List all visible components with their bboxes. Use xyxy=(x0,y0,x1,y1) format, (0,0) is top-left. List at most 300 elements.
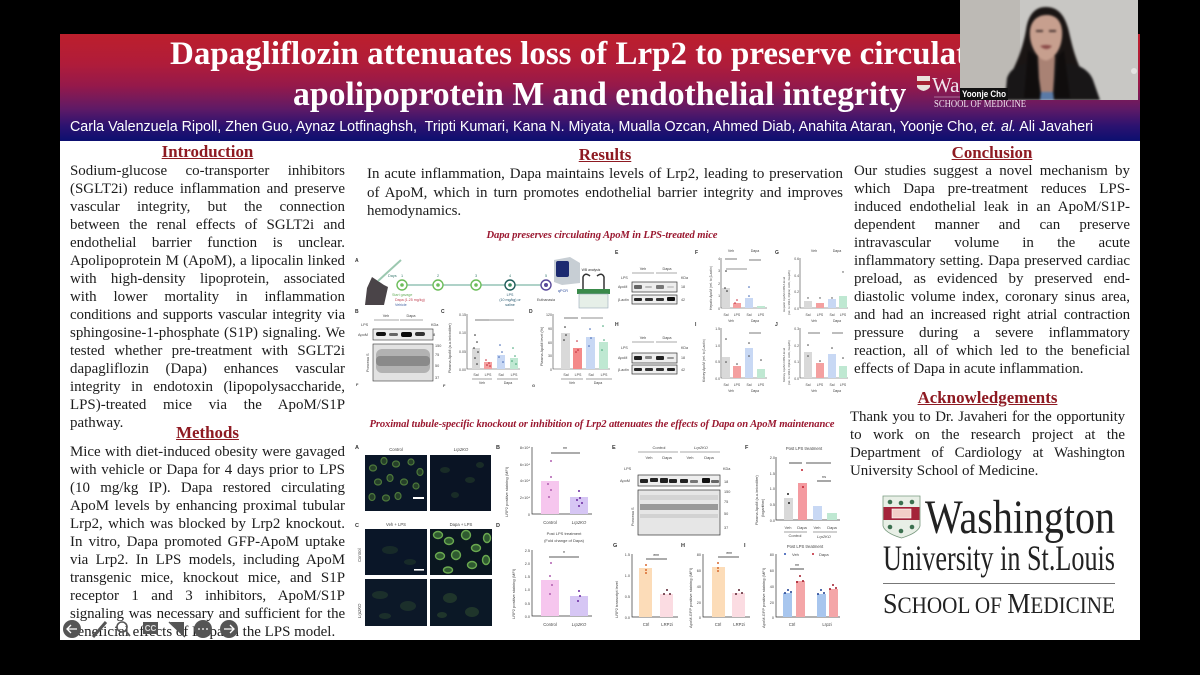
panel F: post LPS plasma ApoM chart: Veh xyxy=(814,525,820,530)
text block: methods: (10 mg/kg IP). Dapa restored circulating xyxy=(70,480,345,496)
panel I: ApoM-GFP veh vs dapa chart: Ctrl xyxy=(789,622,795,627)
panel D: post LPS fold change bar chart: 2.5 xyxy=(525,549,530,553)
panel B: western blot: 50 xyxy=(435,364,439,368)
text block: methods: receptor 1 and 3 inhibitors, ApoM/S1P xyxy=(70,588,345,604)
text block: introduction xyxy=(70,163,345,431)
text block: introduction: LPS)-treated mice via the ApoM/S1P xyxy=(70,397,345,413)
university logo xyxy=(883,491,1115,620)
panel B: LRP2 staining bar chart: ** xyxy=(563,447,567,453)
panel D: plasma ApoM level bar chart: 120 xyxy=(546,313,552,317)
university logo: SCHOOL OF MEDICINE xyxy=(883,588,1115,620)
panel G: hepatic mRNA chart: LPS xyxy=(817,313,824,317)
panel G: hepatic mRNA chart xyxy=(775,249,848,323)
panel I: kidney ApoM chart: I xyxy=(695,322,697,328)
blazer xyxy=(1005,64,1100,100)
panel D: post LPS fold change bar chart: 2.0 xyxy=(525,562,530,566)
panel C: microscopy four conditions: C xyxy=(355,523,359,529)
text block: acknowledgements: Thank you to Dr. Javaheri for the opportunity xyxy=(850,409,1125,425)
panel J: kidney mRNA chart: Sal xyxy=(830,383,835,387)
panel D: post LPS fold change bar chart: Post LPS treatment xyxy=(547,531,582,536)
panel D: plasma ApoM level bar chart: 30 xyxy=(548,354,552,358)
panel H: ApoM-GFP uptake chart: ApoM-GFP positive staining (MFI) xyxy=(688,567,693,628)
text block: introduction: sphingosine-1-phosphate (S1P) signaling. We xyxy=(70,325,345,341)
panel C: plasma ApoM bar chart: Dapa xyxy=(504,381,512,385)
panel E: western blot liver: 42 xyxy=(681,298,685,302)
panel B: western blot: Veh xyxy=(383,314,389,318)
text block: results: In acute inflammation, Dapa maintains levels of Lrp2, leading to preservation xyxy=(367,166,843,182)
panel G: LRP2 transcript chart: 1.0 xyxy=(625,574,630,578)
panel D: plasma ApoM level bar chart: Veh xyxy=(569,381,575,385)
panel I: kidney ApoM chart: 1.0 xyxy=(715,344,720,348)
panel D: plasma ApoM level bar chart: Sal xyxy=(563,373,569,377)
panel C: plasma ApoM bar chart: F xyxy=(443,383,446,388)
panel F: post LPS plasma ApoM chart: Control xyxy=(789,533,802,538)
panel H: western blot kidney: H xyxy=(615,322,619,328)
panel B: western blot: 37 xyxy=(435,376,439,380)
panel D: plasma ApoM level bar chart: Sal xyxy=(588,373,594,377)
text block: introduction: between the renal effects of SGLT2i and xyxy=(70,217,345,233)
text block: conclusion: diastolic volume index, coronary sinus area, xyxy=(854,289,1130,305)
text block: conclusion: pressure during a severe inflammatory xyxy=(854,325,1130,341)
panel A: experiment timeline: saline xyxy=(505,303,515,307)
panel F: post LPS plasma ApoM chart: 1.5 xyxy=(770,472,775,476)
text block: introduction: tested whether pre-treatment with SGLT2i xyxy=(70,343,345,359)
panel B: western blot: Dapa xyxy=(406,314,416,318)
text block: introduction: Sodium-glucose co-transporter inhibitors xyxy=(70,163,345,179)
panel D: post LPS fold change bar chart xyxy=(496,523,592,627)
panel G: hepatic mRNA chart: Sal xyxy=(806,313,811,317)
eyes xyxy=(1036,30,1043,32)
panel E: western blot and ponceau: E xyxy=(612,445,616,451)
panel I: kidney ApoM chart: 0.0 xyxy=(715,377,720,381)
text block: introduction: with lower mortality in inflammation xyxy=(70,289,345,305)
face xyxy=(1030,15,1062,60)
panel G: hepatic mRNA chart: 0.2 xyxy=(794,290,799,294)
panel A: microscopy control vs knockout: Control xyxy=(389,447,403,452)
panel A: experiment timeline: Start gavage xyxy=(392,293,412,297)
panel D: plasma ApoM level bar chart: Dapa xyxy=(594,381,602,385)
panel E: western blot liver: β-actin xyxy=(618,298,629,302)
panel H: western blot kidney xyxy=(615,322,688,374)
panel J: kidney mRNA chart: 0.0 xyxy=(794,377,799,381)
panel F: post LPS plasma ApoM chart: 0.5 xyxy=(770,503,775,507)
panel H: western blot kidney: LPS xyxy=(621,346,628,350)
panel E: western blot and ponceau: Veh xyxy=(687,455,693,460)
panel A: experiment timeline: Days xyxy=(388,274,397,278)
text block: methods: Lrp2, which was blocked by Lrp2 knockout. xyxy=(70,516,345,532)
panel D: plasma ApoM level bar chart: 0 xyxy=(550,368,552,372)
panel A: experiment timeline: 1 xyxy=(401,274,403,278)
panel G: LRP2 transcript chart: G xyxy=(613,543,617,549)
panel I: kidney ApoM chart: 0.5 xyxy=(715,360,720,364)
panel H: western blot kidney: ApoM xyxy=(618,356,627,360)
panel G: LRP2 transcript chart: LRP2 transcript level xyxy=(614,581,619,618)
panel J: kidney mRNA chart: LPS xyxy=(817,383,824,387)
panel F: post LPS plasma ApoM chart: Post LPS treatment xyxy=(786,446,823,451)
panel F: post LPS plasma ApoM chart: Plasma ApoM (a.u./microliter) xyxy=(755,474,759,525)
heading: acknowledgements: Acknowledgements xyxy=(918,388,1057,407)
panel F: hepatic ApoM chart xyxy=(695,249,767,323)
panel F: post LPS plasma ApoM chart: (logarithm) xyxy=(761,498,765,517)
text block: introduction: vascular integrity, but the connection xyxy=(70,199,345,215)
panel I: ApoM-GFP veh vs dapa chart xyxy=(744,543,840,628)
panel C: plasma ApoM bar chart: Sal xyxy=(473,373,479,377)
panel J: kidney mRNA chart: Kidney ApoM mRNA level xyxy=(782,347,786,382)
panel H: ApoM-GFP uptake chart xyxy=(681,543,750,628)
text block: methods: with vehicle or Dapa for 4 days prior to LPS xyxy=(70,462,345,478)
panel H: western blot kidney: 42 xyxy=(681,368,685,372)
text block: conclusion: effects of Dapa in acute inflammation. xyxy=(854,361,1084,377)
panel I: kidney ApoM chart: Sal xyxy=(724,383,729,387)
panel I: kidney ApoM chart: Sal xyxy=(747,383,752,387)
panel I: ApoM-GFP veh vs dapa chart: 0 xyxy=(772,616,774,620)
panel F: hepatic ApoM chart: Dapa xyxy=(751,249,759,253)
panel B: western blot: LPS xyxy=(361,323,369,327)
panel I: kidney ApoM chart: Veh xyxy=(728,389,734,393)
text block: conclusion: dependent manner and can preserve xyxy=(854,217,1130,233)
panel C: plasma ApoM bar chart: 0.10 xyxy=(459,331,466,335)
panel B: LRP2 staining bar chart: 8×10⁴ xyxy=(520,446,530,450)
panel G: LRP2 transcript chart: 1.5 xyxy=(625,553,630,557)
heading: introduction: Introduction xyxy=(162,142,253,161)
panel B: LRP2 staining bar chart xyxy=(496,445,592,525)
panel D: plasma ApoM level bar chart: LPS xyxy=(575,373,582,377)
panel D: plasma ApoM level bar chart: LPS xyxy=(601,373,608,377)
panel E: western blot and ponceau: KDa xyxy=(723,467,731,471)
panel C: plasma ApoM bar chart: C xyxy=(441,309,445,315)
heading: results: Results xyxy=(579,145,631,164)
panel I: kidney ApoM chart: Kidney ApoM (rel. to β-actin) xyxy=(702,339,706,382)
text block: introduction: dapagliflozin (Dapa) enhances vascular xyxy=(70,361,345,377)
panel J: kidney mRNA chart: 0.1 xyxy=(794,360,799,364)
panel B: western blot: F xyxy=(356,382,359,387)
panel G: hepatic mRNA chart: Dapa xyxy=(833,319,841,323)
panel E: western blot and ponceau: 18 xyxy=(724,480,728,484)
panel I: ApoM-GFP veh vs dapa chart: Dapa xyxy=(819,552,829,557)
panel B: LRP2 staining bar chart: 6×10⁴ xyxy=(520,463,530,467)
header logo xyxy=(917,73,1032,110)
panel A: experiment timeline xyxy=(355,257,610,308)
panel C: plasma ApoM bar chart: Sal xyxy=(498,373,504,377)
panel H: ApoM-GFP uptake chart: LRP2i xyxy=(733,622,745,627)
panel F: hepatic ApoM chart: 3 xyxy=(718,269,720,273)
text block: acknowledgements: Department of Cardiology at Washington xyxy=(850,445,1125,461)
panel B: western blot: 18 xyxy=(431,333,435,337)
panel G: hepatic mRNA chart: 0.6 xyxy=(794,257,799,261)
header logo: Washington xyxy=(932,73,1032,97)
panel G: hepatic mRNA chart: Veh xyxy=(811,249,817,253)
text block: methods: signaling was necessary and sufficient for the xyxy=(70,606,345,622)
text block: conclusion: intravascular volume in the acute xyxy=(854,235,1130,251)
panel J: kidney mRNA chart: Dapa xyxy=(833,389,841,393)
panel G: hepatic mRNA chart: Veh xyxy=(811,319,817,323)
panel E: western blot and ponceau xyxy=(612,445,731,535)
name tag: Yoonje Cho xyxy=(962,89,1006,99)
text block: conclusion: inflammatory setting. Dapa preserved cardiac xyxy=(854,253,1130,269)
panel C: plasma ApoM bar chart: LPS xyxy=(511,373,518,377)
panel E: western blot liver: Dapa xyxy=(662,267,672,271)
inner hair strands xyxy=(1024,50,1070,98)
panel B: western blot: 75 xyxy=(435,353,439,357)
text block: results: hemodynamics. xyxy=(367,203,461,219)
panel F: hepatic ApoM chart: LPS xyxy=(734,313,741,317)
panel D: post LPS fold change bar chart: Control xyxy=(543,622,557,627)
panel I: ApoM-GFP veh vs dapa chart: ApoM-GFP positive staining (MFI) xyxy=(761,567,766,628)
panel F: hepatic ApoM chart: LPS xyxy=(758,313,765,317)
panel A: experiment timeline: 5 xyxy=(545,274,547,278)
panel J: kidney mRNA chart: Sal xyxy=(806,383,811,387)
panel D: plasma ApoM level bar chart: Plasma ApoM level (%) xyxy=(540,326,544,366)
panel E: western blot and ponceau: ApoM xyxy=(620,479,630,483)
panel H: ApoM-GFP uptake chart: *** xyxy=(726,552,732,558)
panel B: LRP2 staining bar chart: 0 xyxy=(528,513,530,517)
heading: methods: Methods xyxy=(176,423,239,442)
panel C: plasma ApoM bar chart: 0.05 xyxy=(459,350,466,354)
panel I: kidney ApoM chart: 1.5 xyxy=(715,327,720,331)
panel F: hepatic ApoM chart: 0 xyxy=(718,307,720,311)
panel B: western blot: 150 xyxy=(435,344,441,348)
panel J: kidney mRNA chart: J xyxy=(775,322,778,328)
authors: Carla Valenzuela Ripoll, Zhen Guo, Aynaz Lotfinaghsh, Tripti Kumari, Kana N. Miyata, Mualla Ozcan, Ahmed Diab, Anahita Ataran, Yoonje Cho, et. al. Ali Javaheri xyxy=(70,119,1093,135)
panel A: microscopy control vs knockout: Lrp2KO xyxy=(454,447,469,452)
panel G: LRP2 transcript chart: 0.5 xyxy=(625,595,630,599)
panel B: western blot: Ponceau S xyxy=(366,353,370,372)
text block: results xyxy=(367,166,843,219)
panel E: western blot and ponceau: LPS xyxy=(624,467,632,471)
panel F: post LPS plasma ApoM chart: 0.0 xyxy=(770,519,775,523)
panel H: western blot kidney: Veh xyxy=(640,336,646,340)
panel E: western blot liver xyxy=(615,250,688,304)
panel A: experiment timeline: Dapa (1.25 mg/kg) xyxy=(395,298,425,302)
panel C: plasma ApoM bar chart: 0.15 xyxy=(459,313,466,317)
title: Dapagliflozin attenuates loss of Lrp2 to preserve circulating xyxy=(170,36,1011,72)
panel E: western blot liver: LPS xyxy=(621,276,628,280)
panel I: ApoM-GFP veh vs dapa chart: 40 xyxy=(770,585,774,589)
panel F: post LPS plasma ApoM chart xyxy=(745,445,840,539)
panel H: ApoM-GFP uptake chart: 60 xyxy=(697,569,701,573)
text block: introduction: endothelial barrier function is unclear. xyxy=(70,235,345,251)
panel F: post LPS plasma ApoM chart: F xyxy=(745,445,749,451)
text block: conclusion: which Dapa pre-treatment reduces LPS- xyxy=(854,181,1130,197)
text block: conclusion xyxy=(854,163,1130,377)
panel D: post LPS fold change bar chart: 0.0 xyxy=(525,615,530,619)
text block: acknowledgements xyxy=(850,409,1126,479)
panel A: experiment timeline: LPS xyxy=(507,293,514,297)
text block: introduction: (SGLT2i) reduce inflammation and preserve xyxy=(70,181,345,197)
panel A: experiment timeline: Vehicle xyxy=(395,303,407,307)
panel G: hepatic mRNA chart: Sal xyxy=(830,313,835,317)
panel E: western blot liver: KDa xyxy=(681,276,688,280)
panel J: kidney mRNA chart: (rel. to 36b4, Rpl32, Actb, Gapdh) xyxy=(787,340,791,385)
panel F: hepatic ApoM chart: Sal xyxy=(747,313,752,317)
panel C: plasma ApoM bar chart xyxy=(441,309,520,388)
panel G: hepatic mRNA chart: Hepatic ApoM mRNA level xyxy=(782,276,786,312)
panel H: ApoM-GFP uptake chart: 20 xyxy=(697,601,701,605)
panel H: western blot kidney: KDa xyxy=(681,346,688,350)
text block: acknowledgements: University School of Medicine. xyxy=(850,463,1038,479)
panel E: western blot and ponceau: Lrp2KO xyxy=(694,445,708,450)
panel G: LRP2 transcript chart: *** xyxy=(653,554,659,560)
heading: conclusion: Conclusion xyxy=(952,143,1032,162)
panel G: hepatic mRNA chart: Dapa xyxy=(833,249,841,253)
panel D: post LPS fold change bar chart: * xyxy=(563,551,565,557)
panel G: LRP2 transcript chart: 0.0 xyxy=(625,616,630,620)
panel E: western blot and ponceau: Ponceau S xyxy=(631,507,635,526)
text block: methods: Mice with diet-induced obesity were gavaged xyxy=(70,444,345,460)
panel G: hepatic mRNA chart: G xyxy=(775,250,779,256)
panel C: microscopy four conditions: Lrp2KO xyxy=(357,603,362,618)
panel H: ApoM-GFP uptake chart: Ctrl xyxy=(715,622,721,627)
panel E: western blot and ponceau: 75 xyxy=(724,500,728,504)
text block: methods: beneficial effects of Dapa in the LPS model. xyxy=(70,624,335,640)
panel H: ApoM-GFP uptake chart: H xyxy=(681,543,685,549)
panel H: ApoM-GFP uptake chart: 80 xyxy=(697,553,701,557)
panel F: post LPS plasma ApoM chart: Dapa xyxy=(827,525,838,530)
panel B: western blot: ApoM xyxy=(358,333,368,337)
panel B: LRP2 staining bar chart: Lrp2KO xyxy=(572,520,587,525)
panel E: western blot liver: Veh xyxy=(640,267,646,271)
panel A: experiment timeline: A xyxy=(355,258,359,264)
panel H: ApoM-GFP uptake chart: 0 xyxy=(699,616,701,620)
panel A: microscopy control vs knockout: A xyxy=(355,445,359,451)
panel H: ApoM-GFP uptake chart: 40 xyxy=(697,585,701,589)
panel G: LRP2 transcript chart xyxy=(613,543,678,627)
text block: methods xyxy=(70,444,345,640)
panel I: kidney ApoM chart: Dapa xyxy=(751,389,759,393)
panel F: hepatic ApoM chart: Hepatic ApoM (rel. to β-actin) xyxy=(709,266,713,310)
panel B: western blot: KDa xyxy=(431,323,439,327)
panel E: western blot and ponceau: Control xyxy=(653,445,666,450)
panel C: microscopy four conditions xyxy=(355,522,492,626)
panel E: western blot and ponceau: Veh xyxy=(646,455,652,460)
panel B: western blot xyxy=(355,309,441,387)
text block: introduction: Apolipoprotein M (ApoM), a lipocalin linked xyxy=(70,253,345,269)
panel E: western blot liver: E xyxy=(615,250,619,256)
panel I: ApoM-GFP veh vs dapa chart: Post LPS treatment xyxy=(787,544,824,549)
text block: introduction: integrity in endotoxin (lipopolysaccharide, xyxy=(70,379,345,395)
panel F: hepatic ApoM chart: 1 xyxy=(718,294,720,298)
panel F: post LPS plasma ApoM chart: 1.0 xyxy=(770,487,775,491)
panel I: ApoM-GFP veh vs dapa chart: 20 xyxy=(770,601,774,605)
figure title: bottom: Proximal tubule-specific knockout or inhibition of Lrp2 attenuates the effects of Dapa on ApoM maintenance xyxy=(370,419,835,430)
hair xyxy=(1010,7,1084,98)
text block: conclusion: preload, as evidenced by preserved end- xyxy=(854,271,1130,287)
panel A: microscopy control vs knockout xyxy=(355,445,491,511)
panel B: LRP2 staining bar chart: 2×10⁴ xyxy=(520,496,530,500)
text block: conclusion: and had an increased right atrial contraction xyxy=(854,307,1130,323)
text block: conclusion: induced endothelial leak in an ApoM/S1P- xyxy=(854,199,1130,215)
panel F: hepatic ApoM chart: Sal xyxy=(724,313,729,317)
text block: introduction: pathway. xyxy=(70,415,123,431)
university logo: University in St.Louis xyxy=(883,538,1115,578)
text block: acknowledgements: to work on the research project at the xyxy=(850,427,1125,443)
panel D: plasma ApoM level bar chart: D xyxy=(529,309,533,315)
mouth xyxy=(1040,45,1052,49)
panel E: western blot and ponceau: 50 xyxy=(724,512,728,516)
text block: methods: via Lrp2. In LPS models, including ApoM xyxy=(70,552,345,568)
panel D: plasma ApoM level bar chart: 60 xyxy=(548,341,552,345)
panel A: experiment timeline: (10 mg/kg) or xyxy=(499,298,521,302)
panel J: kidney mRNA chart: LPS xyxy=(840,383,847,387)
panel B: LRP2 staining bar chart: 4×10⁴ xyxy=(520,479,530,483)
panel A: experiment timeline: 3 xyxy=(475,274,477,278)
panel I: ApoM-GFP veh vs dapa chart: Lrp2i xyxy=(822,622,832,627)
panel D: post LPS fold change bar chart: 1.0 xyxy=(525,588,530,592)
text block: conclusion: reaction, all of which led to the beneficial xyxy=(854,343,1130,359)
panel G: LRP2 transcript chart: LRP2i xyxy=(661,622,673,627)
panel C: microscopy four conditions: Control xyxy=(357,548,362,562)
panel H: western blot kidney: β-actin xyxy=(618,368,629,372)
panel E: western blot and ponceau: Dapa xyxy=(704,455,715,460)
panel D: post LPS fold change bar chart: Lrp2KO xyxy=(572,622,587,627)
panel J: kidney mRNA chart: 0.2 xyxy=(794,344,799,348)
panel G: LRP2 transcript chart: Ctrl xyxy=(643,622,649,627)
panel B: LRP2 staining bar chart: LRP2 positive staining (MFI) xyxy=(504,466,509,517)
panel D: plasma ApoM level bar chart: 90 xyxy=(548,327,552,331)
panel E: western blot and ponceau: Dapa xyxy=(662,455,673,460)
panel D: post LPS fold change bar chart: 1.5 xyxy=(525,575,530,579)
panel C: plasma ApoM bar chart: Plasma ApoM (a.u./microliter) xyxy=(448,322,452,373)
panel D: plasma ApoM level bar chart: G xyxy=(532,383,535,388)
text block: introduction: with high-density lipoprotein, associated xyxy=(70,271,345,287)
presentation controls: CC xyxy=(145,624,156,633)
university logo: Washington xyxy=(925,491,1115,544)
blue top xyxy=(1040,92,1054,100)
panel G: hepatic mRNA chart: (rel. to 36b4, Rpl32, Actb, Gapdh) xyxy=(787,270,791,315)
panel A: experiment timeline: Euthanasia xyxy=(537,298,555,302)
text block: conclusion: Our studies suggest a novel mechanism by xyxy=(854,163,1130,179)
panel F: hepatic ApoM chart: F xyxy=(695,250,698,256)
presenter xyxy=(1005,7,1100,100)
text block: introduction: conditions and supports vascular integrity via xyxy=(70,307,345,323)
panel I: ApoM-GFP veh vs dapa chart: 60 xyxy=(770,569,774,573)
panel D: plasma ApoM level bar chart xyxy=(529,309,612,388)
panel C: microscopy four conditions: Veh + LPS xyxy=(386,522,406,527)
panel B: LRP2 staining bar chart: B xyxy=(496,445,500,451)
webcam video panel xyxy=(960,0,1138,100)
panel H: western blot kidney: 18 xyxy=(681,356,685,360)
panel B: western blot: B xyxy=(355,309,359,315)
title xyxy=(170,36,1011,113)
icon: shield xyxy=(883,496,920,538)
neck xyxy=(1038,56,1055,93)
panel D: post LPS fold change bar chart: D xyxy=(496,523,500,529)
panel I: ApoM-GFP veh vs dapa chart: 80 xyxy=(770,553,774,557)
panel F: post LPS plasma ApoM chart: Dapa xyxy=(797,525,808,530)
panel F: hepatic ApoM chart: Veh xyxy=(728,319,734,323)
panel E: western blot and ponceau: 150 xyxy=(724,490,730,494)
panel E: western blot and ponceau: 37 xyxy=(724,526,728,530)
panel A: experiment timeline: WB analysis xyxy=(582,268,601,272)
panel A: experiment timeline: qPCR xyxy=(558,289,568,293)
panel F: hepatic ApoM chart: 4 xyxy=(718,257,720,261)
panel C: plasma ApoM bar chart: LPS xyxy=(485,373,492,377)
panel F: post LPS plasma ApoM chart: ns xyxy=(822,474,826,479)
panel G: hepatic mRNA chart: 0.4 xyxy=(794,274,799,278)
panel I: ApoM-GFP veh vs dapa chart: ** xyxy=(795,564,799,570)
panel A: experiment timeline: 4 xyxy=(509,274,511,278)
presentation controls xyxy=(63,620,238,638)
text block: methods: transgenic mice, knockout mice, and S1P xyxy=(70,570,345,586)
panel F: post LPS plasma ApoM chart: Veh xyxy=(785,525,791,530)
header banner xyxy=(60,34,1140,141)
panel E: western blot liver: 18 xyxy=(681,285,685,289)
text block: results: of ApoM, which in turn promotes endothelial barrier integrity and improves xyxy=(367,185,843,201)
panel G: hepatic mRNA chart: LPS xyxy=(840,313,847,317)
panel C: microscopy four conditions: Dapa + LPS xyxy=(450,522,473,527)
panel D: post LPS fold change bar chart: 0.5 xyxy=(525,602,530,606)
panel J: kidney mRNA chart xyxy=(775,322,848,393)
